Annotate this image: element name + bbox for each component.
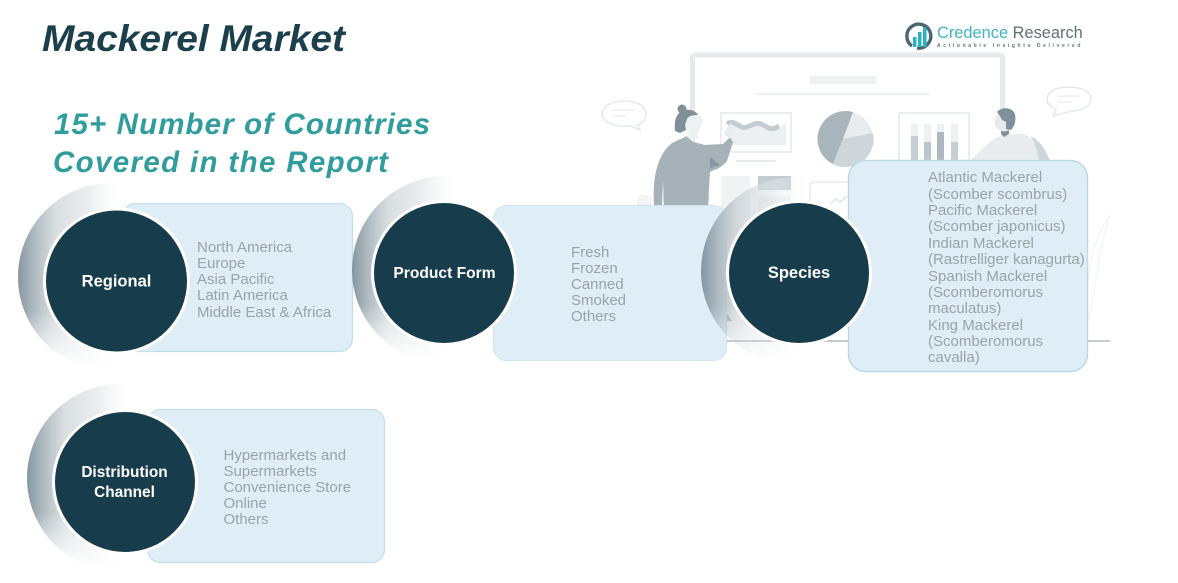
species list: cavalla) <box>928 349 980 366</box>
product form list: Others <box>571 308 616 325</box>
regional heading: Regional <box>82 272 151 290</box>
floor line <box>725 340 1110 342</box>
subtitle <box>53 108 430 179</box>
regional crescent <box>18 184 102 356</box>
product form list: Smoked <box>571 292 626 309</box>
species circle <box>726 200 872 346</box>
regional list: Asia Pacific <box>197 271 275 288</box>
plant leaf <box>1087 215 1110 320</box>
distribution list: Online <box>224 495 267 512</box>
speech bubble right <box>1047 87 1091 116</box>
species crescent <box>701 177 791 350</box>
product form heading: Product Form <box>393 265 496 282</box>
logo: Credence Research: Actionable Insights Delivered <box>937 43 1083 49</box>
product form circle <box>371 200 517 346</box>
species list: King Mackerel <box>928 317 1023 334</box>
product form list: Frozen <box>571 260 618 277</box>
product form list: Fresh <box>571 244 609 261</box>
species list: maculatus) <box>928 300 1001 317</box>
distribution heading: Distribution <box>81 464 168 481</box>
regional list <box>197 239 332 321</box>
species list: (Scomberomorus <box>928 333 1043 350</box>
species list: Pacific Mackerel <box>928 202 1037 219</box>
species list: (Scomberomorus <box>928 284 1043 301</box>
distribution list: Convenience Store <box>224 479 351 496</box>
line chart card <box>721 113 791 152</box>
bar chart card <box>899 113 969 161</box>
panel: product form <box>352 176 726 364</box>
distribution heading <box>81 464 168 501</box>
illustration: presentation background <box>602 55 1110 342</box>
distribution card <box>148 410 384 562</box>
subtitle: 15+ Number of Countries <box>54 108 430 141</box>
panel: regional <box>18 183 352 371</box>
pie chart <box>817 111 874 167</box>
distribution heading: Channel <box>94 484 155 501</box>
species list: Indian Mackerel <box>928 235 1034 252</box>
product form list <box>571 244 626 325</box>
species list: (Rastrelliger kanagurta) <box>928 251 1085 268</box>
distribution list: Supermarkets <box>224 463 317 480</box>
logo: Credence Research: Credence Research <box>937 24 1083 42</box>
presenter figure left <box>654 104 734 206</box>
distribution crescent <box>27 385 112 556</box>
product form crescent <box>352 177 436 348</box>
product form list: Canned <box>571 276 624 293</box>
species heading: Species <box>768 264 830 282</box>
species list: Spanish Mackerel <box>928 268 1047 285</box>
lower cards <box>721 176 750 238</box>
regional list: Latin America <box>197 287 289 304</box>
regional list: Middle East & Africa <box>197 304 332 321</box>
logo: Credence Research <box>907 24 1083 49</box>
subtitle: Covered in the Report <box>53 146 389 179</box>
regional list: Europe <box>197 255 245 272</box>
presenter figure right <box>970 108 1050 161</box>
regional list: North America <box>197 239 293 256</box>
distribution list <box>224 447 351 528</box>
panel: distribution channel <box>27 384 384 572</box>
product form card <box>494 206 726 360</box>
distribution list: Others <box>224 511 269 528</box>
regional circle <box>43 208 190 354</box>
species card <box>848 160 1088 372</box>
species list: Atlantic Mackerel <box>928 169 1042 186</box>
regional card <box>122 204 352 352</box>
speech bubble left <box>602 101 646 130</box>
panel: species <box>701 160 1088 372</box>
species list: (Scomber japonicus) <box>928 218 1066 235</box>
distribution circle <box>52 409 198 555</box>
title: Mackerel Market <box>42 18 347 59</box>
monitor frame <box>692 55 1002 200</box>
species list: (Scomber scombrus) <box>928 186 1067 203</box>
distribution list: Hypermarkets and <box>224 447 346 464</box>
species list <box>928 169 1085 366</box>
